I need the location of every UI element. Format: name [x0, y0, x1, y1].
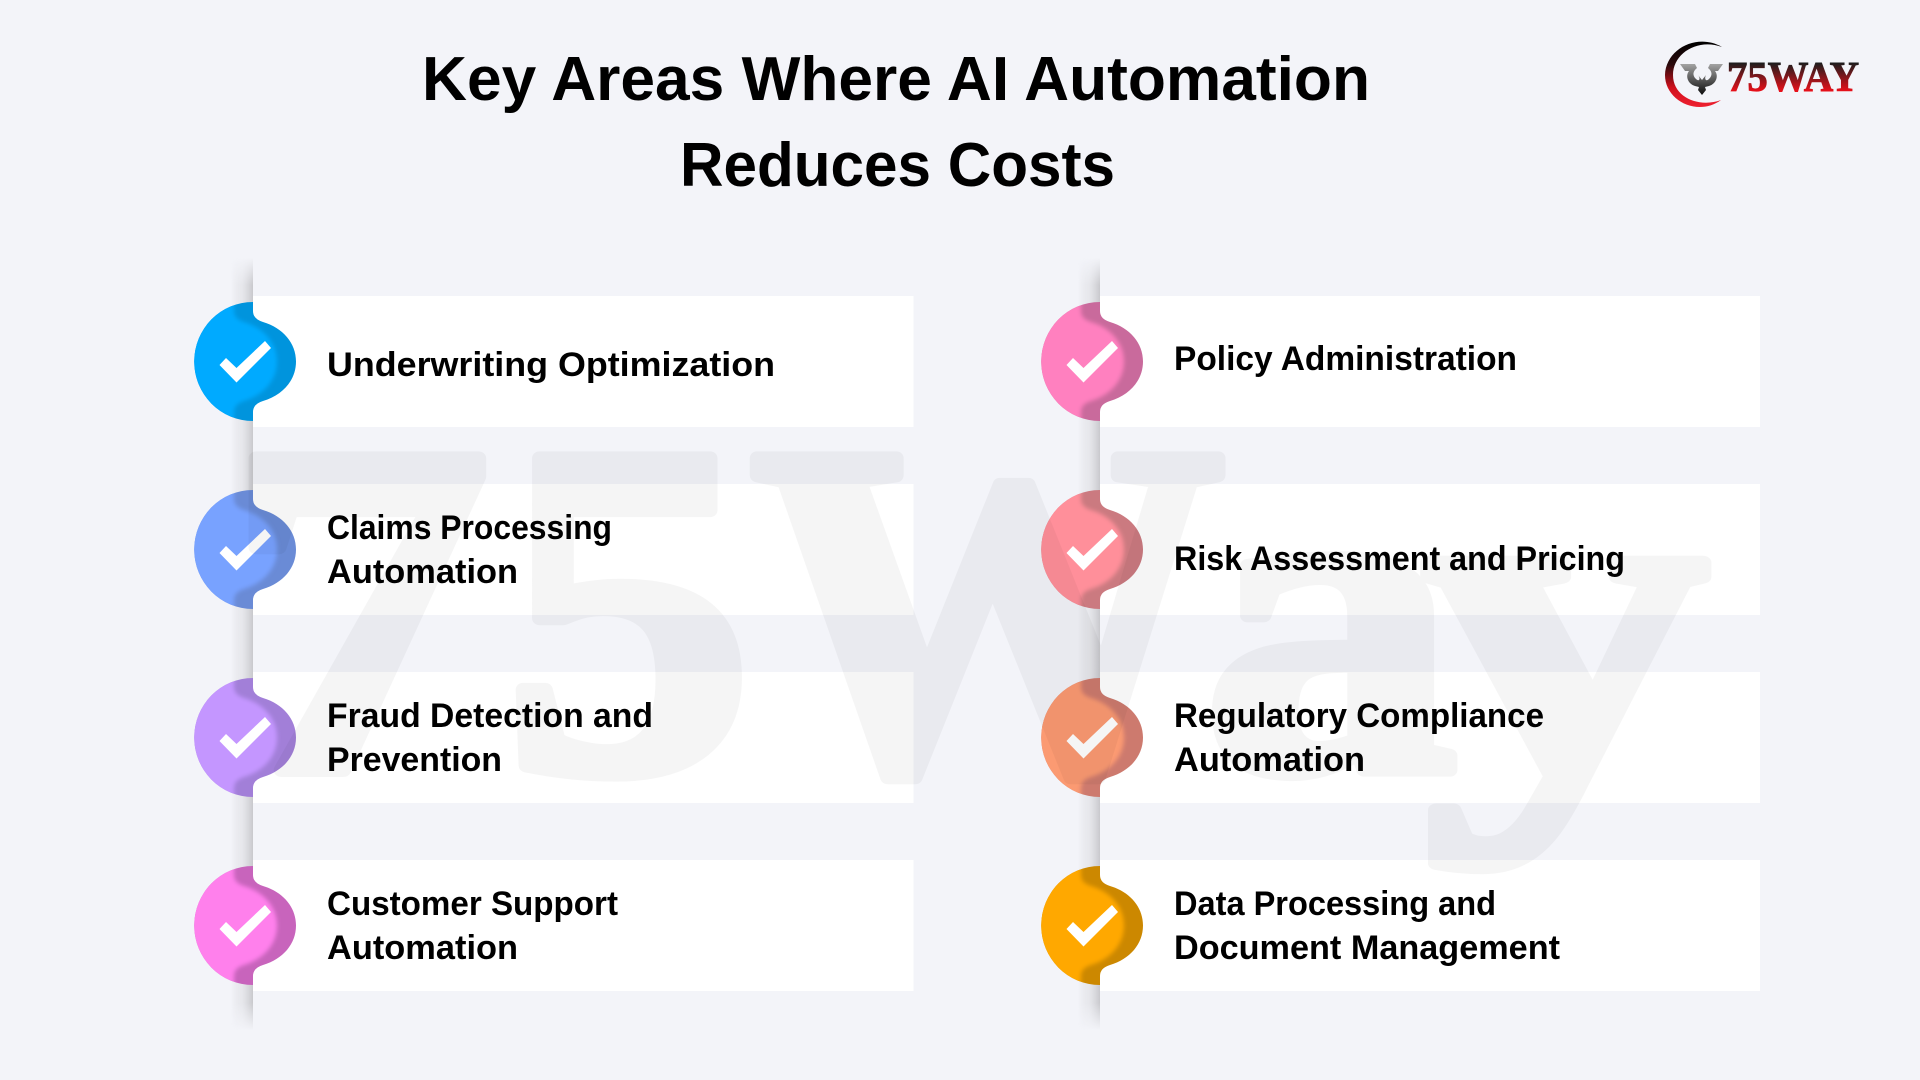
- logo: 75WAY: [1665, 42, 1859, 107]
- label: Risk Assessment and Pricing: [1174, 540, 1625, 578]
- icon: rose check: [1041, 302, 1143, 421]
- logo wordmark: 75WAY: [1727, 55, 1859, 101]
- icon: orange-salmon check: [1041, 678, 1143, 797]
- label: Prevention: [327, 741, 502, 779]
- label: Document Management: [1174, 929, 1560, 967]
- label: Customer Support: [327, 885, 618, 923]
- title: [422, 45, 1370, 200]
- icon: coral check: [1041, 490, 1143, 609]
- watermark: 75Way: a: [1203, 368, 1458, 869]
- timeline shadow: right column: [1083, 264, 1100, 1024]
- panel: Underwriting Optimization: [175, 296, 913, 427]
- watermark: 75Way: W: [750, 346, 1226, 873]
- icon: amber check: [1041, 866, 1143, 985]
- watermark: 75Way: [226, 346, 1709, 874]
- label: [1174, 885, 1560, 967]
- icon: pink check: [194, 866, 296, 985]
- label: [1174, 697, 1544, 779]
- label: Automation: [327, 553, 518, 591]
- title: Key Areas Where AI Automation: [422, 45, 1370, 114]
- label: Automation: [327, 929, 518, 967]
- panel: Policy Administration: [1022, 296, 1760, 427]
- icon: blue check: [194, 302, 296, 421]
- panel: Data Processing and Document Management: [1022, 860, 1760, 991]
- label: [327, 697, 653, 779]
- label: Fraud Detection and: [327, 697, 653, 735]
- panel: Customer Support Automation: [175, 860, 913, 991]
- panel: Risk Assessment and Pricing: [1022, 484, 1760, 615]
- timeline shadow: left column: [236, 264, 253, 1024]
- watermark: 75Way: 7: [226, 347, 491, 874]
- label: Regulatory Compliance: [1174, 697, 1544, 735]
- icon: purple check: [194, 678, 296, 797]
- label: [327, 885, 618, 967]
- icon: periwinkle check: [194, 490, 296, 609]
- panel: Claims Processing Automation: [175, 484, 913, 615]
- label: Automation: [1174, 741, 1365, 779]
- label: Claims Processing: [327, 509, 612, 547]
- title: Reduces Costs: [680, 131, 1115, 200]
- label: Underwriting Optimization: [327, 346, 775, 384]
- label: [327, 509, 612, 591]
- icon: logo ring and horns: [1665, 42, 1723, 107]
- watermark: 75Way: 5: [503, 346, 753, 873]
- label: Data Processing and: [1174, 885, 1496, 923]
- panel: Fraud Detection and Prevention: [175, 672, 913, 803]
- watermark: 75Way: y: [1423, 368, 1709, 869]
- panel: Regulatory Compliance Automation: [1022, 672, 1760, 803]
- label: Policy Administration: [1174, 340, 1517, 378]
